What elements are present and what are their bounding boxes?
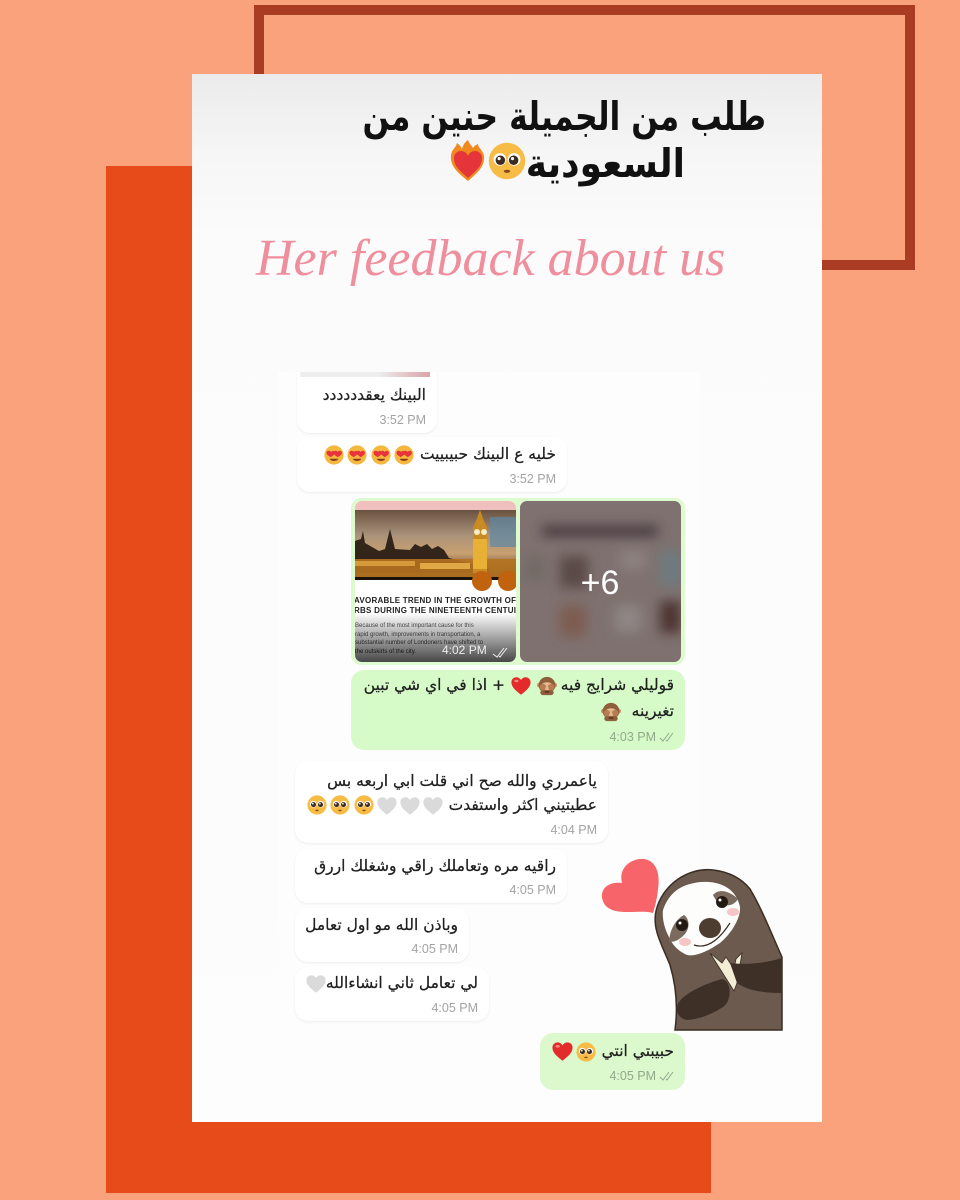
chat bubble: received 4:04: عطيتيني اكثر واستفدت — [449, 796, 597, 814]
panel: white story card — [192, 74, 822, 1122]
title line 1: طلب من الجميلة حنين من — [363, 95, 766, 140]
arms and claws — [710, 953, 742, 991]
image: London article preview: AVORABLE TREND IN THE GROWTH OF — [355, 596, 516, 605]
chat bubble: received 4:05 third — [296, 974, 488, 1022]
chat bubble: received 3:52 second: خليه ع البينك حبيبييت — [420, 445, 556, 463]
chat bubble: received 4:05 first: راقيه مره وتعاملك راقي وشغلك اررق — [314, 857, 556, 875]
chat bubble: received 4:05 second — [296, 916, 468, 963]
chat bubble: received 3:52 first: البينك يعقدددددد — [323, 386, 426, 404]
image: London article preview: substantial number of Londoners have shifted to — [355, 640, 484, 646]
chat bubble: received 3:52 first: 3:52 PM — [379, 413, 426, 427]
icon: heart on fire — [450, 140, 484, 181]
chat bubble: sent 4:03: تغيرينه — [632, 702, 674, 720]
panel: chat screenshot — [278, 372, 700, 1090]
chat bubble: received 4:05 second: وباذن الله مو اول تعامل — [305, 916, 458, 934]
icon: read ticks — [660, 732, 674, 742]
eye patches — [669, 915, 688, 942]
subtitle: her feedback: Her feedback about us — [256, 230, 725, 287]
chat bubble: sent images — [351, 498, 685, 665]
chat bubble: sent 4:03: قوليلي شرايج فيه — [561, 676, 674, 694]
chat bubble: received 3:52 first — [298, 372, 436, 434]
orange block — [106, 166, 711, 1193]
chat bubble: sent 4:05: 4:05 PM — [609, 1069, 656, 1083]
title line 2: السعودية — [526, 142, 685, 187]
frame outline — [254, 5, 915, 270]
image: blurred +6 preview: +6 — [581, 564, 619, 602]
chat bubble: sent 4:03 — [351, 670, 685, 750]
chat bubble: received 3:52 second — [298, 445, 566, 493]
image: London article preview — [355, 501, 516, 662]
image: blurred +6 preview — [520, 501, 681, 662]
chat bubble: received 4:04 — [296, 772, 607, 844]
chat bubble: sent 4:05: حبيبتي انتي — [602, 1042, 674, 1060]
heart — [602, 859, 659, 913]
icon: sloth sticker with heart — [602, 858, 783, 1031]
chat bubble: received 4:04: 4:04 PM — [550, 823, 597, 837]
body — [655, 870, 782, 1030]
chat bubble: received 4:05 first — [296, 857, 566, 904]
chat bubble: received 4:05 third: 4:05 PM — [431, 1001, 478, 1015]
chat bubble: sent 4:03: 4:03 PM — [609, 730, 656, 744]
image: London article preview: RBS DURING THE NINETEENTH CENTUI — [355, 606, 516, 615]
chat bubble: sent 4:03: + اذا في اي شي تبين — [364, 676, 505, 694]
chat bubble: received 3:52 second: 3:52 PM — [509, 472, 556, 486]
chat bubble: sent 4:05 — [540, 1033, 685, 1090]
image: London article preview: the outskirts of the city. — [355, 649, 416, 655]
chat bubble: received 4:05 second: 4:05 PM — [411, 942, 458, 956]
chat bubble: received 4:05 third: لي تعامل ثاني انشاءالله — [326, 974, 478, 992]
icon: pleading face — [488, 142, 526, 180]
image: London article preview: rapid growth, improvements in transportation, a — [355, 632, 481, 638]
icon: read ticks — [660, 1072, 674, 1081]
face — [663, 882, 740, 955]
chat bubble: received 4:04: ياعمرري والله صح اني قلت ابي اربعه بس — [327, 772, 597, 790]
image: London article preview: Because of the most important cause for this — [355, 623, 474, 629]
image: London article preview: 4:02 PM — [442, 643, 487, 657]
chat bubble: received 4:05 first: 4:05 PM — [509, 883, 556, 897]
